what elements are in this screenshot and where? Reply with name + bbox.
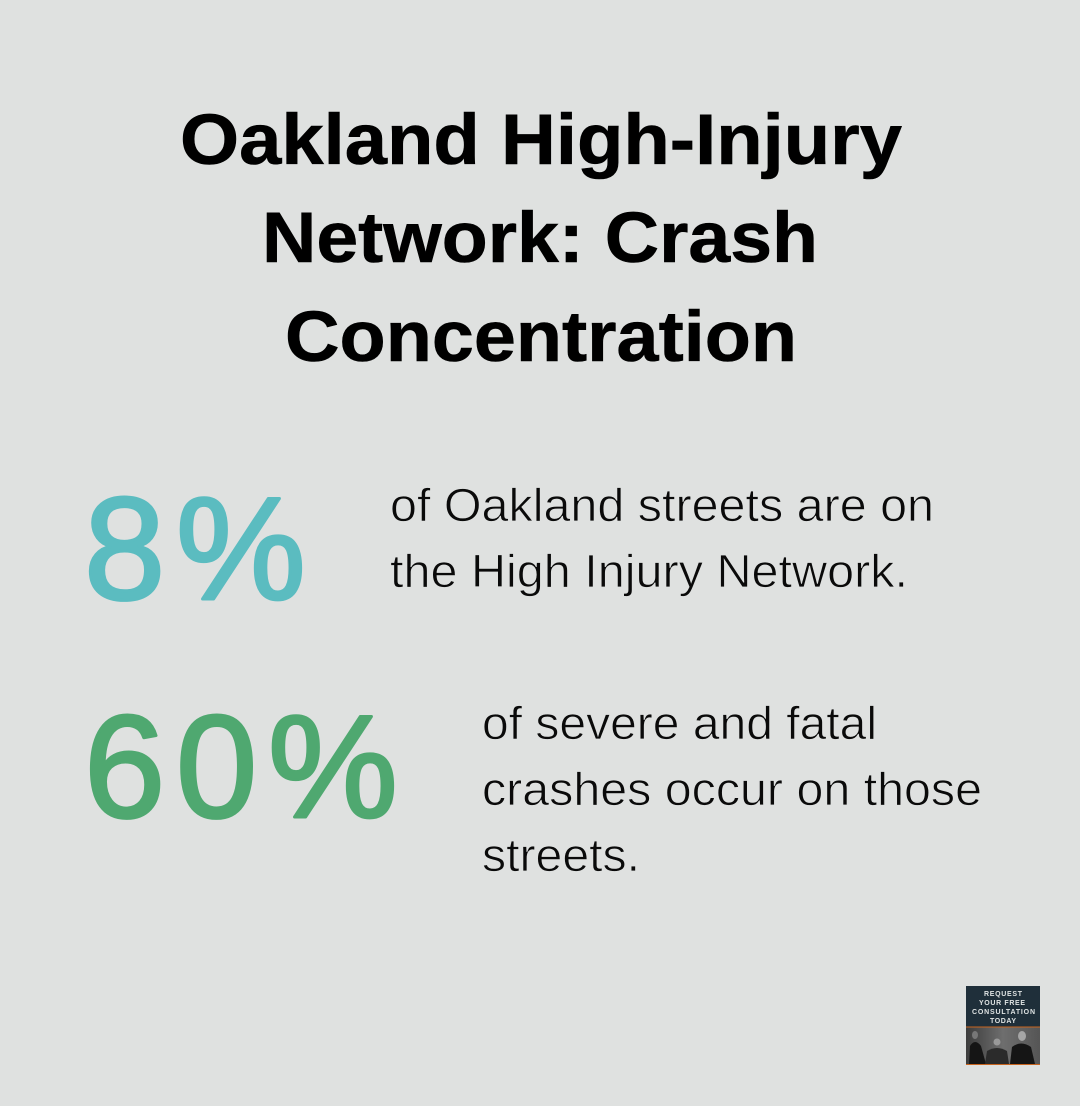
title: Concentration (285, 298, 797, 377)
title: Oakland High-Injury (180, 101, 903, 180)
badge: request consultation (966, 986, 1040, 1065)
badge photo: three people (969, 1031, 1035, 1064)
stat: 8%: % (176, 467, 306, 630)
badge text: YOUR FREE (979, 1000, 1025, 1007)
stat: 60%: % (268, 685, 398, 848)
description: 60% stat: crashes occur on those (482, 763, 982, 815)
stat: 60%: 0 (176, 685, 257, 848)
description: 8% stat: the High Injury Network. (390, 545, 908, 597)
description: 8% stat (390, 479, 934, 597)
title: Network: Crash (262, 199, 818, 278)
badge text: CONSULTATION (972, 1009, 1035, 1016)
stat: 8%: 8 (84, 467, 165, 630)
badge text (972, 991, 1035, 1025)
badge text: REQUEST (984, 991, 1023, 998)
badge text: TODAY (990, 1018, 1016, 1025)
stat: 60%: 6 (84, 685, 165, 848)
description: 60% stat: of severe and fatal (482, 697, 877, 749)
description: 8% stat: of Oakland streets are on (390, 479, 934, 531)
description: 60% stat (482, 697, 982, 881)
description: 60% stat: streets. (482, 829, 640, 881)
title (180, 101, 903, 377)
